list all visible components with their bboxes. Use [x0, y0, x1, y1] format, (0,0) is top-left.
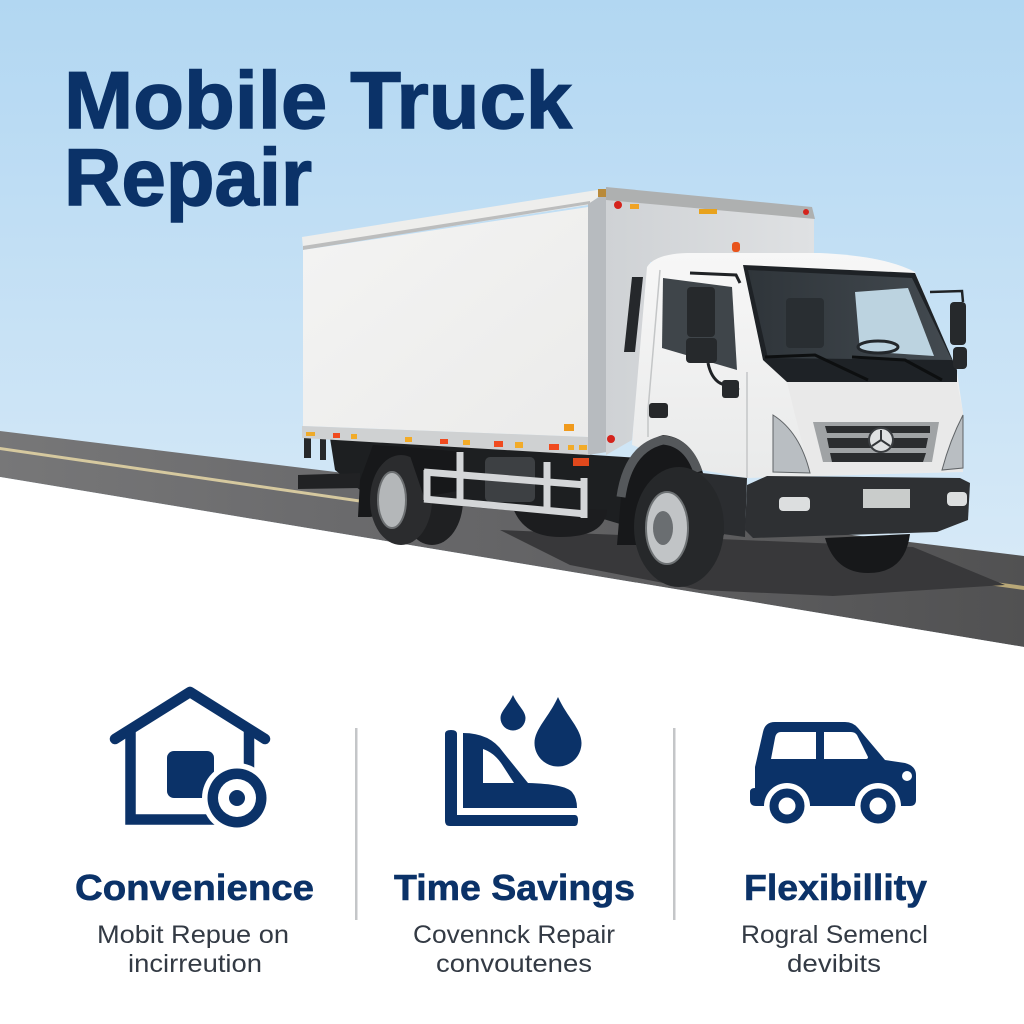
front wheel arch interior — [617, 435, 724, 545]
star logo — [869, 428, 893, 452]
fuel tank — [485, 457, 535, 502]
hood shade — [787, 382, 963, 473]
title: Mobile Truck — [64, 56, 573, 146]
heading: Time Savings — [394, 867, 635, 908]
roof strip shadow line — [303, 201, 590, 250]
bumper — [745, 476, 970, 538]
box front top strip — [606, 187, 815, 219]
cargo box side — [303, 207, 588, 437]
cab step — [693, 472, 747, 537]
cab door line — [648, 270, 747, 478]
box pillar — [588, 192, 607, 455]
side guard — [424, 452, 586, 518]
column 1: convenience — [75, 692, 314, 978]
column 2: time savings — [394, 695, 635, 978]
white lower panel — [0, 477, 1024, 1024]
description line 2: incirreution — [128, 950, 262, 978]
truck shadow — [500, 530, 1005, 596]
marker lights — [306, 189, 809, 466]
mirror arm — [690, 273, 740, 390]
description line 2: devibits — [787, 950, 881, 978]
middle wheel — [512, 505, 607, 537]
cab body — [632, 253, 963, 478]
door handle — [649, 403, 668, 418]
front right wheel — [825, 534, 910, 573]
cargo box front — [606, 199, 814, 455]
sky background — [0, 0, 1024, 650]
heading: Convenience — [75, 867, 314, 908]
windshield glare — [855, 288, 934, 356]
icon: car — [750, 722, 916, 829]
number plate — [863, 489, 910, 508]
headlights — [773, 415, 810, 473]
column 3: flexibility — [741, 722, 928, 978]
truck — [298, 187, 970, 587]
chassis — [330, 438, 640, 530]
road centre line — [0, 447, 370, 504]
heading: Flexibillity — [744, 867, 927, 908]
road — [0, 431, 1024, 647]
description line 2: convoutenes — [436, 950, 592, 978]
seat — [786, 298, 824, 348]
rear wheel arch — [358, 445, 440, 517]
front wheel arch trim — [621, 440, 698, 497]
tail bracket — [304, 438, 326, 460]
front wheel left — [634, 467, 724, 587]
side vent — [624, 277, 643, 352]
icon: droplets and car seat — [445, 695, 582, 826]
windshield interior — [748, 270, 952, 360]
cargo box roof strip — [302, 190, 607, 249]
windshield frame — [743, 265, 957, 382]
dividers — [355, 728, 358, 920]
grille — [813, 422, 939, 462]
side window — [662, 278, 737, 370]
description: Covennck Repair — [413, 921, 615, 949]
wipers — [765, 355, 942, 380]
cargo lower rail — [302, 426, 590, 455]
title: Repair — [64, 133, 312, 223]
rear arch cover — [407, 447, 463, 497]
description: Mobit Repue on — [97, 921, 289, 949]
icon: house with wheel — [115, 692, 272, 833]
mirror right — [930, 291, 963, 302]
rear wheels — [370, 455, 463, 545]
mirror left — [687, 287, 715, 337]
fog lights — [779, 497, 810, 511]
rear bumper bar — [298, 473, 360, 489]
steering wheel — [858, 341, 898, 353]
description: Rogral Semencl — [741, 921, 928, 949]
